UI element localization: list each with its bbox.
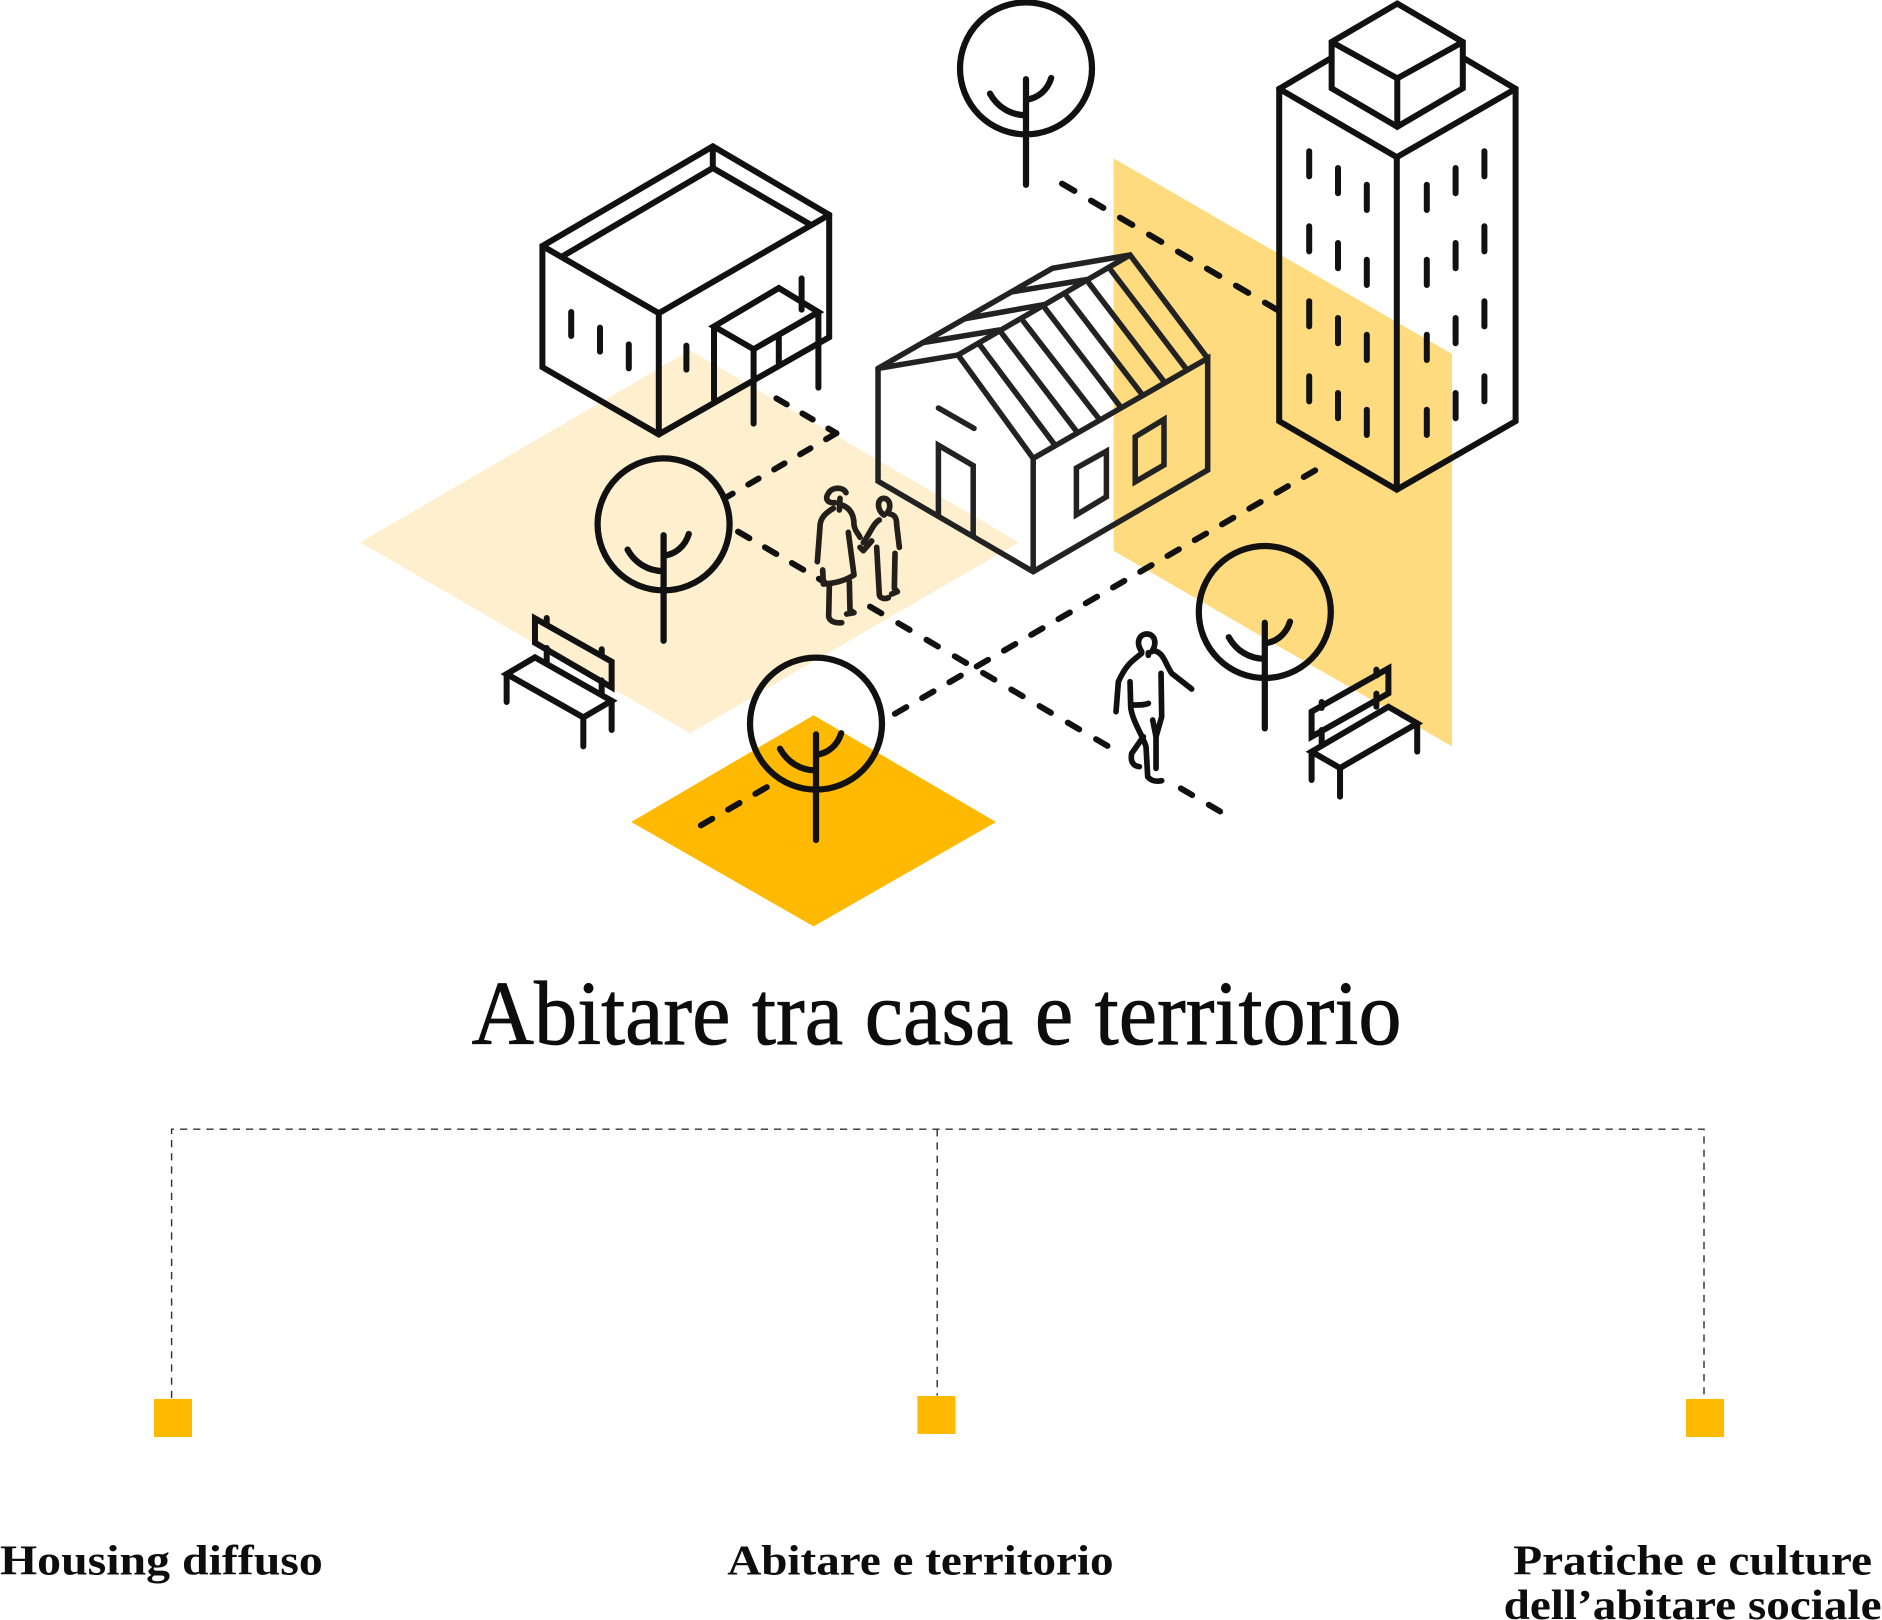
- label: Housing diffuso: Housing diffuso: [0, 1538, 323, 1584]
- marker: Pratiche e culture: [1686, 1399, 1724, 1437]
- title: Abitare tra casa e territorio: [472, 963, 1402, 1064]
- tree: top: [960, 2, 1092, 185]
- person walking: [1116, 634, 1192, 781]
- people: couple holding hands: [817, 488, 899, 623]
- tree: bottom: [750, 658, 882, 840]
- dashed paths: [698, 184, 1315, 827]
- strong yellow ground plane: [631, 715, 996, 926]
- tower: [1279, 4, 1516, 490]
- windows: [1076, 451, 1106, 515]
- pale yellow ground plane: [360, 350, 1019, 733]
- house: [878, 255, 1208, 572]
- bench: left: [507, 618, 612, 746]
- left building: [542, 146, 829, 434]
- label: Pratiche e culture dell'abitare sociale: Pratiche e culture: [1513, 1538, 1872, 1584]
- tree: right: [1199, 546, 1331, 728]
- bench: right: [1312, 668, 1417, 797]
- label: Abitare e territorio: Abitare e territorio: [727, 1538, 1114, 1584]
- marker: Abitare e territorio: [917, 1396, 955, 1434]
- door: [938, 445, 973, 535]
- medium yellow vertical plane: [1114, 158, 1452, 746]
- dashed connector tree: [172, 1129, 1704, 1398]
- marker: Housing diffuso: [154, 1399, 192, 1437]
- label: Pratiche e culture dell'abitare sociale: [1504, 1538, 1882, 1620]
- tree: left: [598, 458, 730, 641]
- porch: [714, 278, 818, 424]
